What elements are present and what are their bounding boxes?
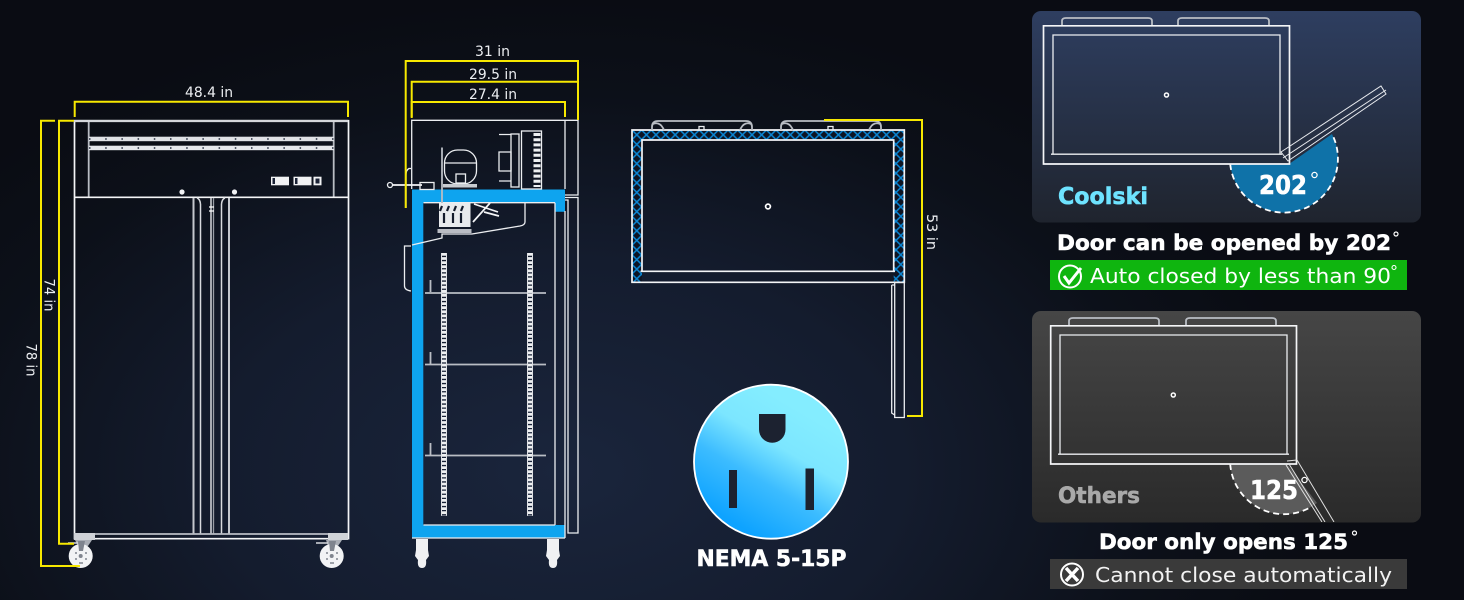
dimension: depth 53 in [824,120,939,416]
dimension: width 48.4 in [75,85,348,117]
fridge plan [1044,18,1290,164]
right caster wheel [316,540,344,568]
dimension: height 78 in [22,121,80,566]
screws [179,189,237,195]
brand label: Others [1058,484,1140,509]
heading: door only opens: Door only opens 125 [1099,530,1348,555]
center dot [766,204,770,209]
callout: auto closed [1050,260,1407,290]
dimension: depth 31 in: 31 in [475,44,510,60]
opening angle sector [1230,464,1317,514]
casters [415,539,560,568]
open door [1286,460,1334,522]
callout text: Auto closed by less than 90 [1090,264,1391,288]
condenser [499,131,542,189]
open door [892,282,904,418]
panel: Coolski [1032,11,1421,222]
shelves [425,280,546,456]
NEMA 5-15P plug [694,385,848,572]
cabinet outline [74,121,348,539]
dimension: depth 31 in [406,44,578,208]
icon: check [1059,266,1081,288]
right blade [806,468,814,510]
open door [1281,86,1386,161]
control panel [271,177,322,185]
panel background [1032,11,1421,222]
fridge plan [1051,318,1296,464]
compressor [442,148,477,205]
power cord [388,168,434,291]
top view of refrigerator [632,120,939,418]
dimension: height 74 in [40,121,74,544]
callout: cannot close [1050,559,1407,589]
dimension: depth 27.4 in: 27.4 in [469,87,517,103]
sector dashed edge [1230,134,1338,213]
cabinet outline [412,120,578,538]
callout text: Cannot close automatically [1095,563,1392,587]
opening angle sector [1230,134,1338,213]
angle value: 125 [1250,476,1298,506]
heading: door can be opened: Door can be opened by 202 [1057,231,1391,256]
cabinet outline [632,130,904,282]
ground pin [759,414,786,443]
shelf rails [442,253,532,516]
plug label: NEMA 5-15P [696,547,846,572]
base rail [74,533,348,535]
dimension: height 74 in: 74 in [40,278,56,312]
dimension: height 78 in: 78 in [22,344,38,376]
dimension: depth 27.4 in [412,87,565,117]
side section view of refrigerator [388,44,578,568]
evaporator and drain tray [412,203,525,245]
dimension: depth 53 in: 53 in [923,214,939,250]
door handles [652,121,881,130]
left caster wheel [68,540,93,568]
panel: Others [1032,311,1421,522]
dimension: depth 29.5 in: 29.5 in [469,67,517,83]
plug face [694,385,848,539]
dimension: width 48.4 in: 48.4 in [185,85,233,101]
icon: cross [1061,564,1083,586]
dimension: depth 29.5 in [412,67,578,118]
door seam lines [194,198,229,534]
insulated walls with blue hatch [632,130,904,282]
degree sign [1392,266,1396,270]
brand label: Coolski [1058,184,1148,210]
panel background [1032,311,1421,522]
sector dashed edge [1230,464,1311,514]
left blade [729,470,737,508]
angle value: 202 [1259,171,1307,201]
hinges [74,533,348,540]
insulation in blue [412,190,565,538]
top header panel [74,121,348,197]
front view of refrigerator [22,85,348,568]
